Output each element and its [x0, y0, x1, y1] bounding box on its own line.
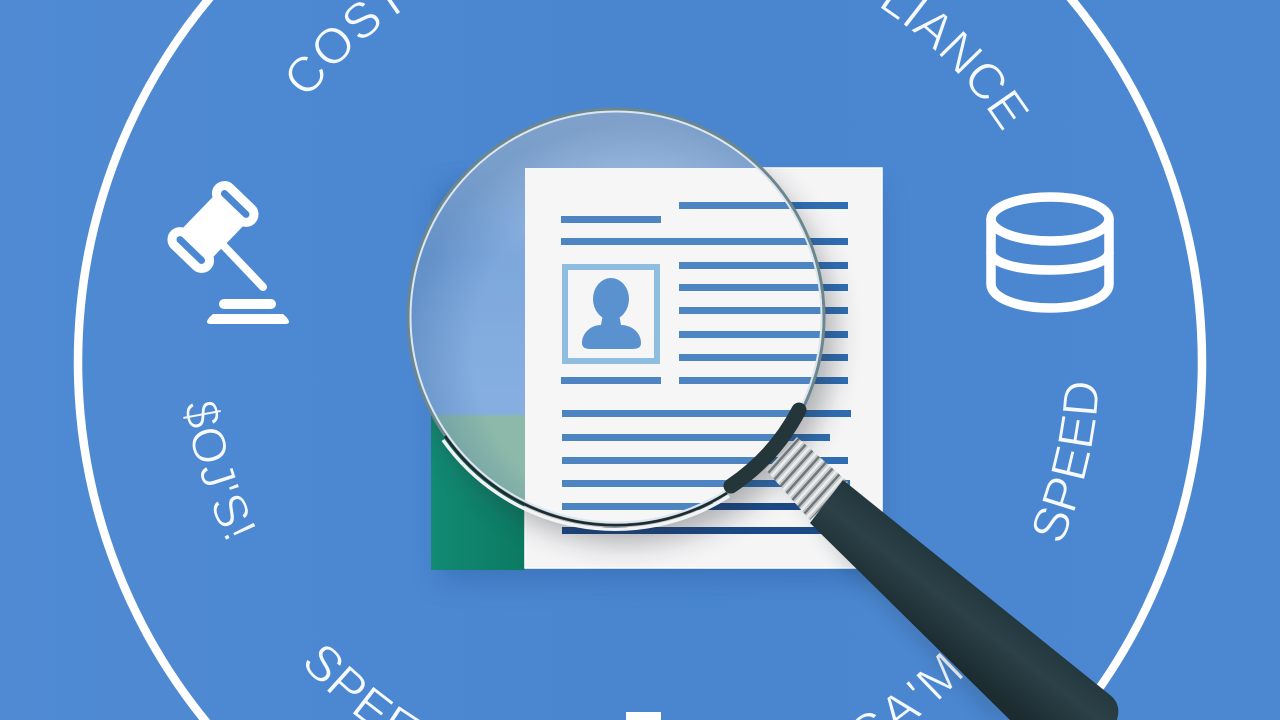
magnifier collar [731, 410, 799, 486]
green block behind document [431, 415, 525, 570]
photo seen through lens [565, 267, 657, 361]
magnifying glass lens [412, 110, 822, 524]
metal ferrule [766, 437, 848, 520]
label: SPEED right: SPEED [1034, 383, 1098, 541]
handle shadow [770, 470, 1030, 720]
document body lines [562, 262, 851, 487]
document shadow [440, 190, 880, 580]
green seen through lens [434, 415, 525, 502]
magnifier shadow on document and green block [418, 127, 834, 543]
icon: database [991, 197, 1109, 308]
document header lines [561, 202, 848, 245]
lens rim [408, 109, 824, 529]
dark lower lines [562, 503, 832, 534]
magnifier grip [810, 480, 1118, 720]
document lines seen through lens [561, 202, 851, 510]
document seen through lens [525, 168, 822, 524]
label: garbled cost left: $OJ'S! [183, 402, 256, 540]
lens edge shading [412, 110, 756, 500]
document [525, 168, 882, 568]
bottom icon fragment [626, 712, 661, 720]
lens tint [410, 110, 759, 415]
icon: gavel [169, 182, 289, 324]
